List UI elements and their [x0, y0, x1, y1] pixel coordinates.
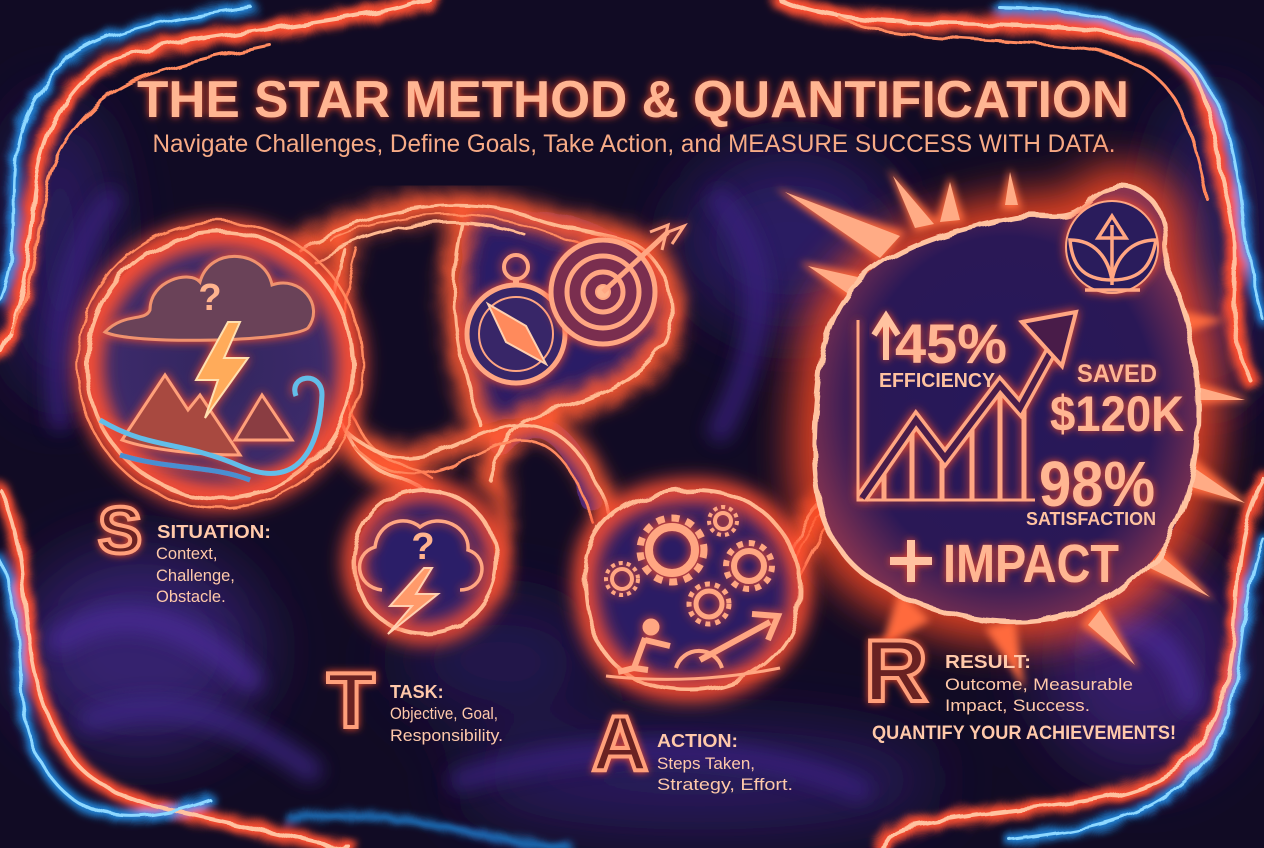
label: result: RESULT:: [945, 652, 1031, 672]
label: result: QUANTIFY YOUR ACHIEVEMENTS!: [872, 723, 1176, 744]
icon: cloud with question mark and bolt: [360, 521, 482, 634]
icon: target with arrow: [551, 225, 684, 344]
metric: saved $120K: SAVED: [1077, 360, 1157, 388]
label: task: TASK:: [390, 682, 444, 702]
flow path network: [300, 206, 858, 610]
metric: 98% satisfaction: 98%: [1039, 448, 1155, 520]
metric: 45% efficiency: EFFICIENCY: [879, 370, 996, 392]
metric: plus impact: [890, 534, 1119, 594]
metric: plus impact: IMPACT: [943, 534, 1119, 594]
label: situation: Challenge,: [156, 567, 235, 585]
sunburst rays: [814, 186, 1198, 622]
panel: situation: [77, 222, 363, 508]
label: result: Outcome, Measurable: [945, 676, 1133, 694]
icon: growth arrow with leaves: [1066, 201, 1158, 293]
label: situation: SITUATION:: [157, 522, 271, 542]
label: result: R: [864, 621, 928, 720]
metric: 45% efficiency: 45%: [895, 312, 1007, 375]
label: situation: [98, 493, 271, 606]
label: result: [864, 621, 1176, 744]
subtitle: Navigate Challenges, Define Goals, Take Action, and MEASURE SUCCESS WITH DATA.: [152, 130, 1116, 158]
icon: storm cloud with lightning and mountains: [100, 256, 322, 480]
label: task: Responsibility.: [390, 727, 503, 745]
metric: 45% efficiency: [874, 312, 1007, 392]
label: task: [327, 656, 503, 745]
metric: 98% satisfaction: SATISFACTION: [1026, 509, 1156, 529]
metric: saved $120K: [1050, 360, 1184, 442]
title: THE STAR METHOD & QUANTIFICATION: [137, 71, 1129, 129]
label: result: Impact, Success.: [945, 697, 1090, 715]
label: task: Objective, Goal,: [390, 705, 498, 723]
panel: task cloud: [353, 490, 497, 634]
panel: task cloud: ?: [411, 526, 435, 568]
label: situation: Obstacle.: [156, 588, 226, 606]
label: action: A: [592, 699, 648, 787]
panel: action: [585, 490, 800, 690]
bar chart with rising arrow: [858, 312, 1076, 500]
panel: task target and compass: [467, 225, 684, 383]
label: task: T: [327, 656, 375, 744]
metric: saved $120K: $120K: [1050, 386, 1184, 442]
label: action: Steps Taken,: [657, 755, 755, 773]
icon: compass: [467, 255, 565, 383]
panel: situation: ?: [198, 277, 222, 319]
label: situation: S: [98, 493, 142, 567]
label: action: Strategy, Effort.: [657, 776, 793, 794]
label: situation: Context,: [156, 545, 217, 563]
icon: gears and person pushing arrow: [606, 507, 780, 679]
fill behind compass and target: [456, 210, 675, 425]
label: action: ACTION:: [657, 731, 738, 751]
panel: result: [775, 168, 1250, 690]
label: action: [592, 699, 793, 794]
